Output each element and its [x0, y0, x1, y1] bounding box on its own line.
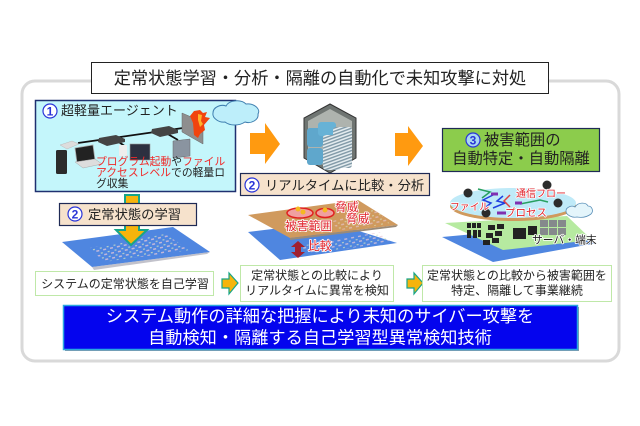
layer labels: ファイル: [450, 202, 489, 213]
small cloud: [566, 203, 592, 217]
icon: server: [304, 104, 356, 173]
arrow: orange one: [250, 123, 280, 164]
layer labels: プロセス: [505, 207, 547, 219]
icon: small pc: [119, 145, 127, 156]
threat labels: 脅威: [335, 200, 359, 214]
arrow: down green and yellow: [116, 195, 147, 245]
label: learning steady state: 2: [72, 208, 79, 222]
arrow: orange two: [395, 126, 423, 166]
icon: tablet: [60, 141, 79, 149]
outer rounded frame: [22, 81, 619, 361]
icon: cloud: [213, 101, 259, 125]
label: step 3: 自動特定・自動隔離: [452, 150, 590, 168]
virus icons: [464, 180, 562, 218]
text box: detect anomaly: 定常状態との比較により: [251, 268, 383, 282]
icon: numbered circle 1: 1: [47, 104, 54, 118]
icon: laptop: [75, 145, 102, 168]
server and terminal icons: [467, 223, 537, 245]
map layer: left: [62, 227, 210, 270]
layer labels: [450, 187, 597, 246]
label: learning steady state: [60, 204, 196, 226]
layer labels: 通信フロー: [516, 187, 566, 200]
title: 定常状態学習・分析・隔離の自動化で未知攻撃に対処: [114, 68, 526, 88]
illustration: isolation layers: [442, 180, 597, 262]
threat hot spots: [287, 206, 334, 218]
threat labels: [285, 200, 370, 253]
panel description: グ収集: [96, 176, 129, 190]
threat labels: 脅威: [346, 212, 370, 226]
icon: network line: [78, 127, 190, 147]
icon: firewall with flame: [182, 110, 210, 144]
grey servers: [540, 220, 566, 235]
icon: desktop tower: [173, 139, 190, 158]
map layers: centre: [248, 200, 398, 260]
panel: ultra-light agent: [36, 100, 236, 192]
conclusion banner: 自動検知・隔離する自己学習型異常検知技術: [148, 328, 492, 348]
label: real-time compare: リアルタイムに比較・分析: [265, 178, 424, 193]
text box: detect anomaly: [240, 266, 394, 302]
title: [92, 62, 548, 94]
text box: isolate: 定常状態との比較から被害範囲を: [427, 268, 607, 282]
label: learning steady state: 定常状態の学習: [88, 207, 181, 222]
flow lines: [478, 189, 548, 213]
icon: monitor: [130, 144, 150, 160]
disc layer: [450, 191, 576, 221]
text box: isolate: 特定、隔離して事業継続: [451, 282, 583, 298]
arrow: small one: [222, 273, 238, 294]
label: step 3: 3: [470, 134, 477, 148]
text box: isolate: [422, 266, 612, 302]
conclusion banner: [64, 306, 579, 351]
panel description: アクセスレベルでの軽量ロ: [96, 166, 225, 179]
text box: self learning: システムの定常状態を自己学習: [41, 276, 209, 291]
icon: numbered circle 1: [43, 104, 57, 118]
panel description: プログラム起動やファイル: [96, 154, 225, 168]
threat labels: 比較: [308, 239, 332, 253]
label: step 3: [442, 128, 600, 172]
panel description: [96, 154, 225, 190]
label: step 3: 被害範囲の: [484, 131, 560, 149]
label: real-time compare: 2: [249, 178, 256, 192]
icon: network switches: [98, 126, 178, 146]
panel heading: 超軽量エージェント: [61, 103, 178, 118]
arrow: double compare: [291, 241, 305, 258]
text box: detect anomaly: リアルタイムに異常を検知: [245, 284, 389, 298]
text box: self learning: [36, 272, 214, 296]
label: real-time compare: [240, 174, 430, 196]
conclusion banner: システム動作の詳細な把握により未知のサイバー攻撃を: [106, 306, 534, 326]
arrow: small two: [407, 273, 423, 294]
layer labels: サーバ・端末: [532, 232, 597, 246]
icon: phone: [56, 150, 67, 174]
threat labels: 被害範囲: [285, 219, 332, 233]
